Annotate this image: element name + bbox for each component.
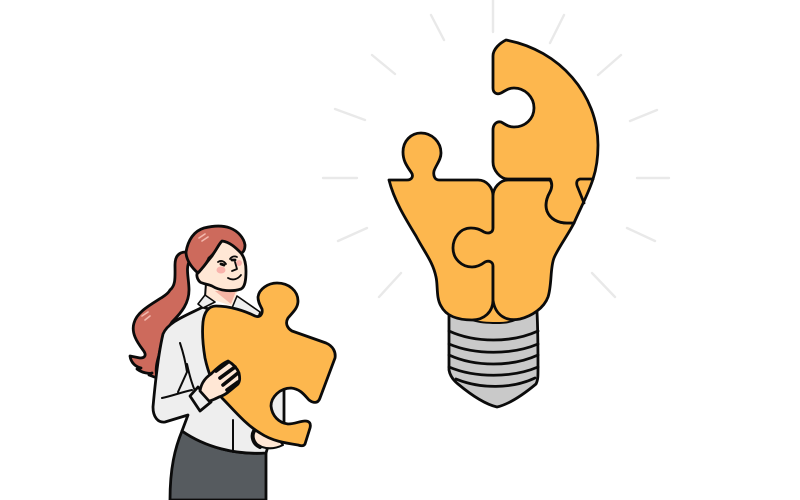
skirt: [170, 431, 266, 500]
shirt cuff: [190, 387, 211, 411]
fingers: [216, 362, 238, 390]
hand on puzzle: [200, 361, 240, 401]
dark fingers under puzzle: [253, 431, 260, 447]
neck: [205, 280, 238, 306]
bulb puzzle notch: far right: [577, 179, 593, 203]
icon: puzzle light bulb: [389, 40, 598, 407]
hair: ponytail: [130, 252, 190, 378]
hair highlights: [142, 234, 208, 320]
collar: [198, 295, 260, 318]
shirt details: [162, 343, 233, 452]
bulb screw base: [449, 306, 538, 407]
bulb puzzle piece: lower right: [453, 180, 574, 320]
hand under puzzle: [252, 429, 283, 448]
face: [197, 240, 246, 291]
neck outline: [205, 283, 206, 297]
shirt: [153, 307, 284, 453]
hair: top: [186, 226, 245, 273]
puzzle piece held by woman: [203, 283, 335, 446]
neck shadow: [215, 291, 236, 304]
icon: light rays around bulb: [323, 0, 669, 297]
woman figure: [130, 226, 335, 500]
bulb puzzle piece: lower left: [389, 133, 493, 320]
cheeks: [216, 260, 242, 274]
bulb puzzle piece: upper right: [493, 40, 598, 223]
eyes, nose and mouth: [218, 256, 241, 279]
